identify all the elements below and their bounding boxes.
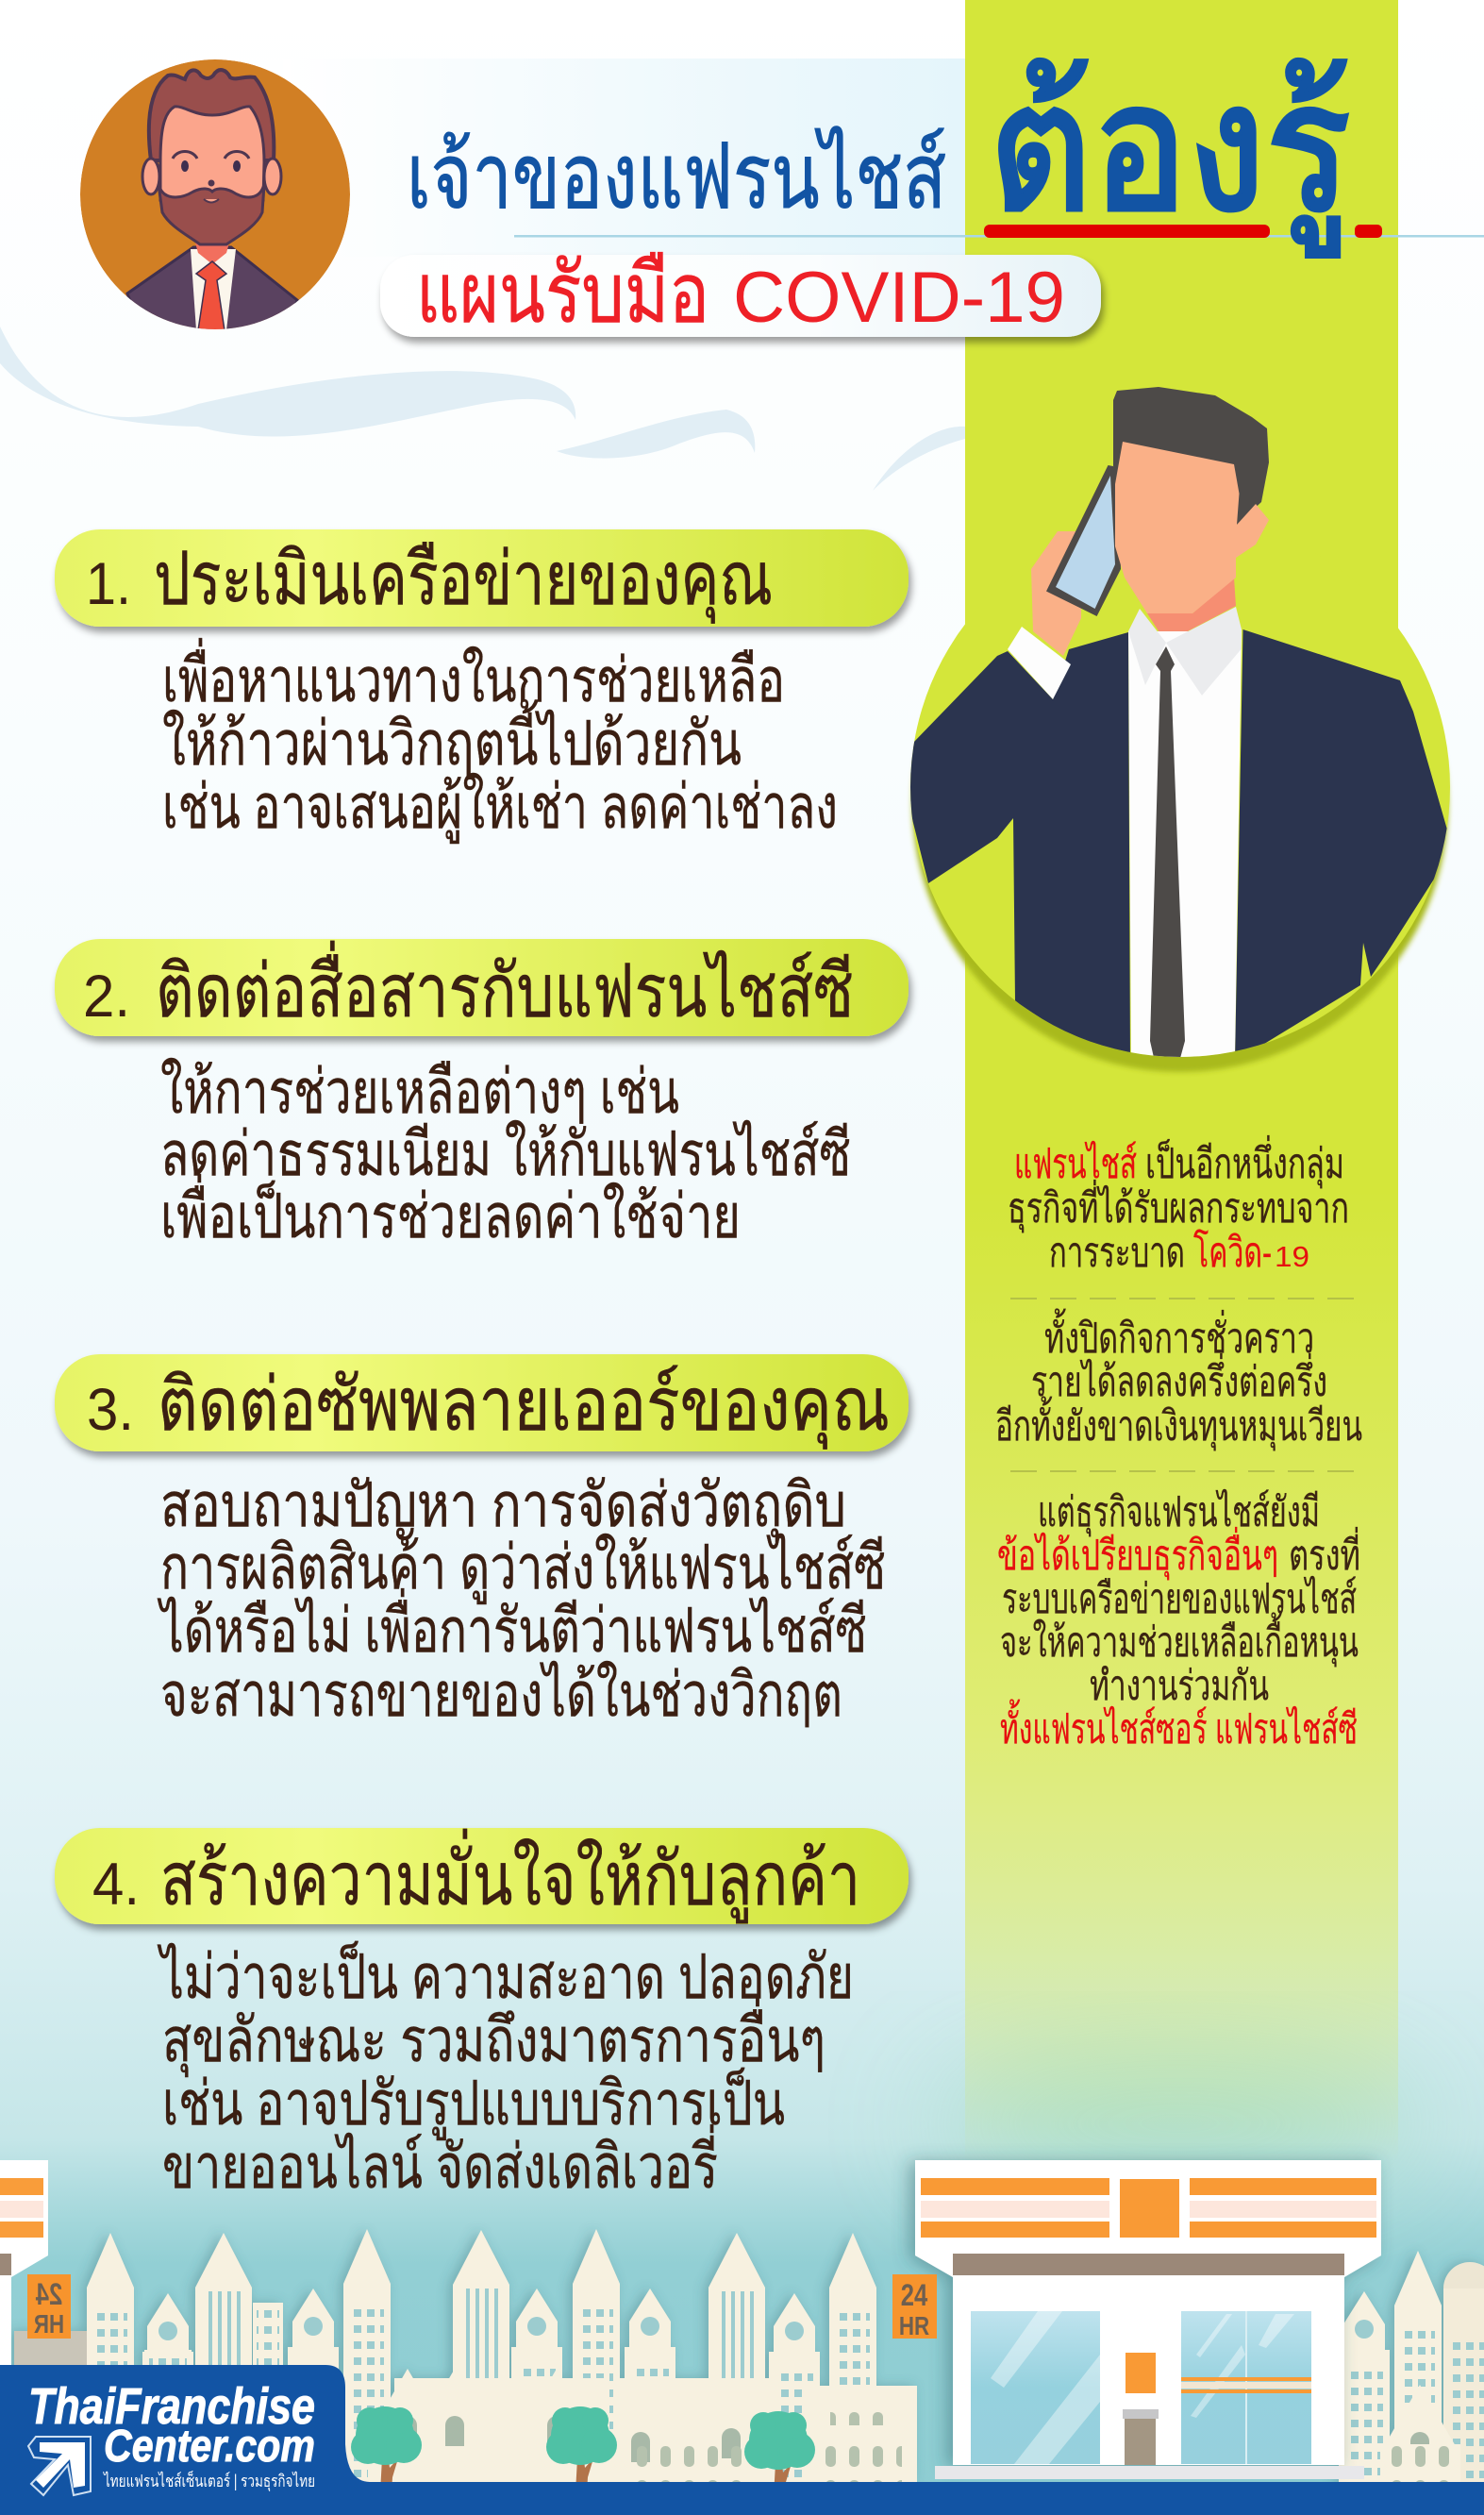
side text: business closures	[995, 1308, 1362, 1451]
side text: franchise impact: โควิด-	[1193, 1229, 1272, 1276]
city skyline	[14, 2229, 1484, 2506]
side text: franchise advantage: ทำงานร่วมกัน	[1090, 1663, 1269, 1709]
side text: business closures: รายได้ลดลงครึ่งต่อครึ่ง	[1031, 1352, 1327, 1405]
right window	[1181, 2311, 1311, 2464]
left store fragment: HR	[34, 2310, 64, 2339]
section 2: 2.	[83, 964, 130, 1030]
background swirl	[0, 327, 965, 491]
side text: franchise impact: 19	[1275, 1240, 1309, 1273]
section 1: ให้ก้าวผ่านวิกฤตนี้ไปด้วยกัน	[162, 699, 742, 778]
section 1: ประเมินเครือข่ายของคุณ	[154, 537, 773, 624]
section 1: เพื่อหาแนวทางในการช่วยเหลือ	[162, 638, 785, 714]
section 4: ขายออนไลน์ จัดส่งเดลิเวอรี่	[162, 2124, 718, 2201]
subtitle pill: COVID-19	[733, 258, 1065, 338]
section 4: ไม่ว่าจะเป็น ความสะอาด ปลอดภัย	[157, 1941, 854, 2011]
convenience store	[892, 2160, 1381, 2479]
left window	[971, 2311, 1100, 2464]
green side band	[965, 0, 1398, 2161]
section 2: ให้การช่วยเหลือต่างๆ เช่น	[160, 1057, 679, 1126]
title divider line	[514, 235, 1484, 238]
title emphasis: ต้องรู้	[989, 48, 1351, 257]
logo panel: ThaiFranchise	[28, 2378, 315, 2435]
section 1: เช่น อาจเสนอผู้ให้เช่า ลดค่าเช่าลง	[162, 772, 838, 844]
side text: business closures: ทั้งปิดกิจการชั่วคราว	[1044, 1308, 1314, 1362]
side text: franchise advantage	[997, 1488, 1360, 1752]
door	[1123, 2353, 1159, 2465]
left store fragment	[0, 2160, 71, 2369]
side text: franchise impact: แฟรนไชส์	[1014, 1140, 1137, 1187]
side text: franchise impact: การระบาด	[1049, 1230, 1185, 1276]
side text: franchise impact: เป็นอีกหนึ่งกลุ่ม	[1145, 1134, 1344, 1189]
side text: franchise advantage: ตรงที่	[1289, 1526, 1360, 1579]
side text: franchise impact: ธุรกิจที่ได้รับผลกระทบจาก	[1008, 1179, 1349, 1233]
avatar: bearded businessman	[80, 59, 350, 332]
section 2	[55, 939, 909, 1250]
24 HR sign: HR	[899, 2312, 929, 2341]
logo panel	[0, 2365, 370, 2515]
title heading: เจ้าของแฟรนไชส์	[407, 126, 946, 227]
section 2: ติดต่อสื่อสารกับแฟรนไชส์ซี	[156, 941, 854, 1032]
section 3: การผลิตสินค้า ดูว่าส่งให้แฟรนไชส์ซี	[160, 1533, 886, 1604]
section 3: ติดต่อซัพพลายเออร์ของคุณ	[158, 1363, 890, 1450]
section 2: เพื่อเป็นการช่วยลดค่าใช้จ่าย	[160, 1174, 741, 1250]
section 4: 4.	[92, 1852, 140, 1918]
logo panel: Center.com	[104, 2422, 315, 2472]
section 3: สอบถามปัญหา การจัดส่งวัตถุดิบ	[160, 1470, 846, 1543]
green sky tint	[934, 2057, 1425, 2189]
section 4: สร้างความมั่นใจให้กับลูกค้า	[160, 1829, 860, 1923]
red underline	[984, 225, 1382, 238]
section 3: จะสามารถขายของได้ในช่วงวิกฤต	[160, 1660, 842, 1729]
left store fragment: 24	[36, 2278, 62, 2312]
logo panel: ไทยแฟรนไชส์เซ็นเตอร์ | รวมธุรกิจไทย	[103, 2470, 315, 2491]
trees	[351, 2406, 815, 2497]
section 1: 1.	[86, 551, 131, 617]
side text: franchise advantage: ข้อได้เปรียบธุรกิจอื่นๆ	[997, 1526, 1278, 1581]
24 HR sign: 24	[901, 2279, 927, 2313]
section 3: 3.	[87, 1377, 134, 1443]
subtitle pill: แผนรับมือ	[416, 246, 709, 340]
icon: arrow	[28, 2437, 91, 2495]
section 3: ได้หรือไม่ เพื่อการันตีว่าแฟรนไชส์ซี	[157, 1588, 867, 1665]
side text: franchise advantage: แต่ธุรกิจแฟรนไชส์ยังมี	[1038, 1488, 1320, 1537]
section 4: เช่น อาจปรับรูปแบบบริการเป็น	[162, 2068, 785, 2140]
section 4	[55, 1828, 909, 2201]
illustration: man on phone	[906, 387, 1453, 1072]
title backdrop	[283, 59, 965, 257]
footer band	[0, 2482, 1484, 2515]
subtitle pill	[380, 246, 1101, 340]
side text: franchise impact	[1008, 1134, 1349, 1276]
section 1	[55, 529, 909, 844]
section 4: สุขลักษณะ รวมถึงมาตรการอื่นๆ	[162, 1998, 825, 2078]
section 3	[55, 1354, 909, 1729]
24 HR sign	[892, 2274, 937, 2341]
section 2: ลดค่าธรรมเนียม ให้กับแฟรนไชส์ซี	[160, 1119, 851, 1188]
